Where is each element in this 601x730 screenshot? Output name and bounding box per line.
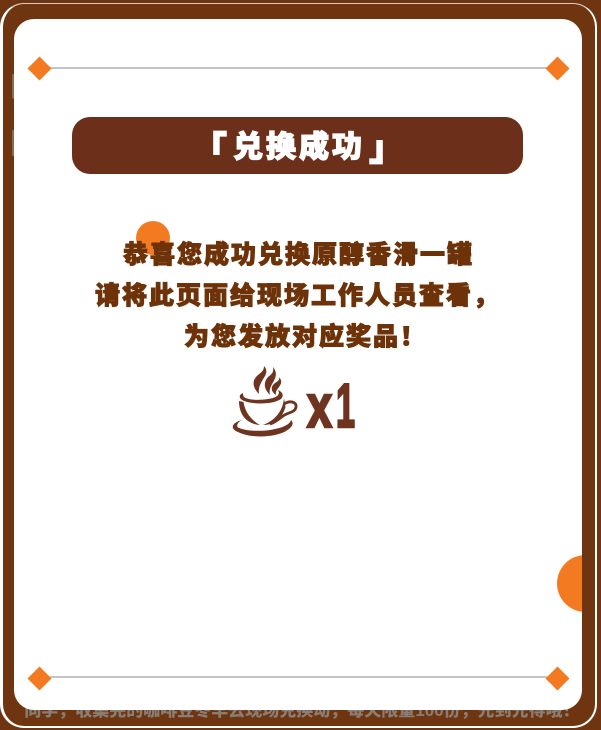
orange circle: top left of message bbox=[136, 221, 170, 255]
cup rim bbox=[240, 390, 283, 403]
cup handle bbox=[270, 402, 296, 424]
top right diamond bbox=[545, 56, 569, 80]
title text: 」 bbox=[369, 127, 405, 168]
quantity x1 bbox=[307, 372, 355, 441]
bottom right diamond bbox=[545, 666, 569, 690]
message text bbox=[95, 240, 500, 351]
message line 1: 恭喜您成功兑换原醇香滑一罐 bbox=[123, 241, 474, 269]
message line 2: 请将此页面给现场工作人员查看， bbox=[95, 282, 500, 310]
message line 3: 为您发放对应奖品！ bbox=[184, 323, 427, 351]
title text bbox=[191, 127, 405, 170]
top divider line bbox=[50, 67, 547, 69]
title text: 兑换成功 bbox=[233, 131, 365, 164]
saucer bbox=[233, 420, 293, 436]
bottom divider line bbox=[50, 676, 547, 678]
quantity x1: 1 bbox=[336, 372, 355, 440]
ghost left edge marks bbox=[12, 74, 14, 156]
orange circle: right edge bbox=[557, 555, 601, 612]
quantity x1: x bbox=[307, 373, 332, 440]
ghost footer text: 同学，收集完的咖啡豆冬羊去现场兑换动，每天限量100份，先到先得哦！ bbox=[24, 701, 580, 720]
top left diamond bbox=[27, 56, 51, 80]
icon: coffee cup bbox=[233, 366, 296, 436]
coffee cup icon with x1 quantity bbox=[232, 366, 355, 440]
title banner bbox=[72, 117, 523, 174]
steam bbox=[254, 366, 266, 394]
title text: 「 bbox=[191, 129, 227, 170]
cup body bbox=[239, 401, 260, 425]
bottom left diamond bbox=[27, 666, 51, 690]
